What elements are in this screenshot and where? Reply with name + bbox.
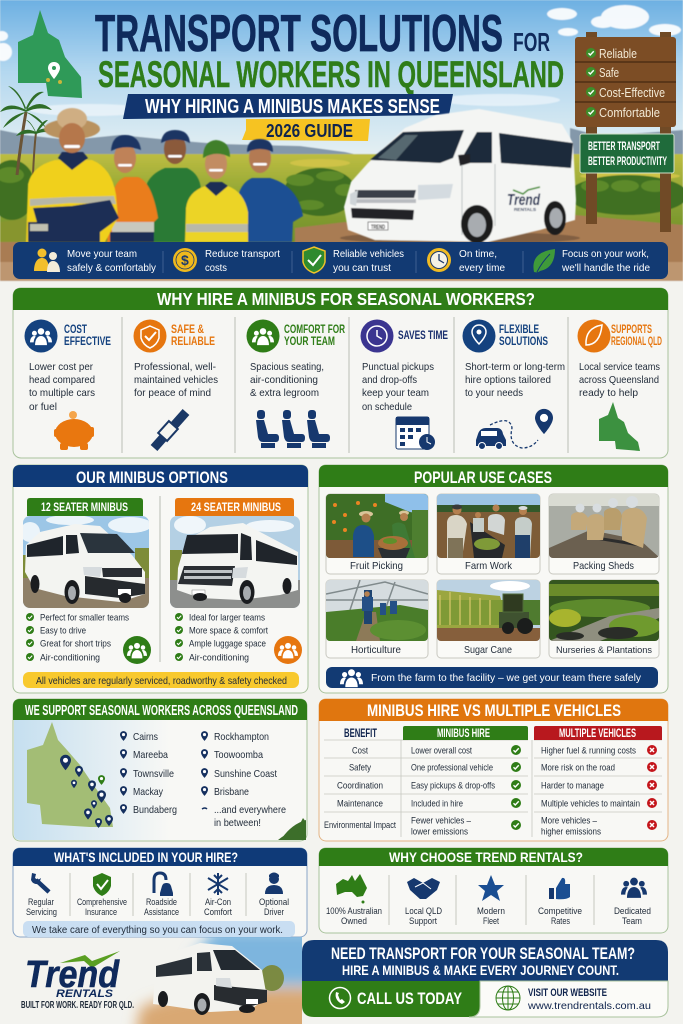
callout: farm to facility (326, 667, 658, 688)
column: regional QLD: Local service teams (579, 361, 660, 373)
panel: why choose trend rentals: WHY CHOOSE TREND RENTALS? (389, 849, 583, 865)
item: local support (405, 878, 442, 927)
text: focus on your work: Focus on your work, (562, 248, 649, 260)
table: multiple vehicles column: More vehicles – (541, 816, 598, 826)
guide badge: 2026 GUIDE (266, 121, 353, 141)
list: service towns: Rockhampton (214, 731, 269, 743)
icon: check list 12 seater: Great for short trips (40, 638, 111, 650)
list: service towns: Brisbane (214, 786, 249, 798)
text: reduce costs: costs (205, 262, 227, 274)
panel: our minibus options: OUR MINIBUS OPTIONS (76, 469, 228, 487)
panel: call to action: HIRE A MINIBUS & MAKE EVERY JOURNEY COUNT. (342, 962, 619, 978)
panel: call to action (302, 940, 668, 1017)
text: on time: On time, (459, 248, 497, 260)
table: multiple vehicles column (541, 745, 657, 838)
table header (344, 726, 662, 740)
item: modern fleet (477, 875, 505, 927)
icon: clock (427, 248, 451, 272)
icon: Queensland map with pin (18, 10, 82, 98)
item: regular servicing: Servicing (26, 907, 57, 918)
column: safe and reliable (134, 320, 218, 448)
icon: check list 24 seater: Ample luggage space (189, 638, 266, 650)
column: cost effective: to multiple cars (29, 387, 95, 399)
wooden sign (575, 32, 676, 232)
worker: orange vest (107, 135, 158, 242)
table header: MULTIPLE VEHICLES (559, 728, 636, 740)
worker: hat and crossed arms (26, 108, 119, 242)
item: competitive rates: Competitive (538, 906, 582, 917)
item: roadside assistance: Roadside (146, 897, 177, 908)
photo: 24 seater bus (170, 516, 300, 608)
logo: trend rentals: RENTALS (56, 988, 114, 1000)
column: safe and reliable: SAFE & (171, 322, 204, 336)
icon: check list 24 seater (175, 612, 268, 664)
title: FOR (513, 27, 550, 57)
item: regular servicing (26, 873, 57, 918)
button: call us today: CALL US TODAY (357, 989, 463, 1008)
item: local support: Local QLD (405, 906, 442, 917)
subtitle ribbon: WHY HIRING A MINIBUS MAKES SENSE (145, 96, 440, 118)
subtitle ribbon (123, 94, 453, 119)
text: reduce costs (205, 248, 280, 274)
column: safe and reliable: maintained vehicles (134, 374, 218, 386)
card: fruit picking: Fruit Picking (350, 560, 403, 572)
icon: car route to pin (476, 409, 553, 450)
panel: why hire a minibus (13, 288, 668, 458)
panel: popular use cases: POPULAR USE CASES (414, 469, 552, 487)
table: benefit labels: Environmental Impact (324, 820, 396, 830)
table header: MINIBUS HIRE (437, 728, 490, 740)
item: optional driver: Optional (259, 897, 289, 908)
card: sugar cane (437, 580, 540, 658)
panel: why choose trend rentals (319, 848, 668, 933)
icon: Queensland map (599, 402, 640, 451)
panel: minibus vs multiple vehicles (319, 699, 668, 841)
table: minibus hire column (411, 745, 521, 838)
column: cost effective: head compared (29, 374, 95, 386)
photo: minibus in outback (128, 937, 302, 1024)
table: multiple vehicles column: More risk on the road (541, 762, 615, 774)
icon: people (34, 248, 60, 272)
column: flexible (462, 320, 565, 450)
card: packing sheds (549, 494, 660, 574)
callout: we take care: We take care of everything so you can focus on your work. (32, 924, 283, 936)
column: safe and reliable: Professional, well- (134, 361, 216, 373)
item: dedicated team (614, 878, 651, 927)
text: reduce costs: Reduce transport (205, 248, 280, 260)
minibus hero: Trend (507, 192, 541, 209)
12 seater option: 12 SEATER MINIBUS (41, 500, 128, 514)
palm trees (0, 86, 56, 175)
panel: what's included: WHAT'S INCLUDED IN YOUR HIRE? (54, 849, 238, 865)
item: modern fleet: Modern (477, 906, 505, 917)
minibus hero (340, 109, 580, 244)
item: optional driver: Driver (264, 907, 284, 918)
icon: check list 12 seater: Perfect for smaller teams (40, 612, 129, 624)
callout: safety checked: All vehicles are regularly serviced, roadworthy & safety checked (36, 675, 287, 687)
item: comprehensive insurance: Comprehensive (77, 897, 127, 908)
column: comfort: air-conditioning (250, 374, 318, 386)
worker: blue shirt (235, 139, 303, 242)
item: competitive rates (538, 878, 582, 927)
worker: green shirt (144, 130, 201, 242)
item: air-con comfort (204, 873, 232, 918)
hero scene background (0, 0, 683, 285)
item: regular servicing: Regular (28, 897, 54, 908)
workers group (26, 108, 303, 242)
wooden sign: Comfortable (599, 105, 660, 120)
table: benefit labels: Coordination (337, 780, 383, 792)
text: focus on your work (561, 248, 650, 274)
column: saves time: SAVES TIME (398, 328, 448, 342)
list: service towns: Bundaberg (133, 804, 177, 816)
callout: farm to facility: From the farm to the facility – we get your team there safely (371, 672, 642, 684)
item: modern fleet: Fleet (483, 916, 499, 927)
card: horticulture (326, 580, 428, 658)
column: safe and reliable: RELIABLE (171, 334, 215, 348)
column: regional QLD: SUPPORTS (611, 322, 652, 336)
panel: minibus vs multiple vehicles: MINIBUS HIRE VS MULTIPLE VEHICLES (367, 701, 621, 720)
panel: what's included (13, 848, 307, 937)
panel: queensland coverage (13, 699, 307, 841)
24 seater option (170, 498, 302, 664)
item: competitive rates: Rates (551, 916, 570, 927)
productivity sign (580, 134, 674, 173)
table: benefit labels: Cost (352, 746, 368, 756)
panel: queensland coverage: WE SUPPORT SEASONAL WORKERS ACROSS QUEENSLAND (25, 703, 298, 719)
column: saves time (360, 320, 448, 450)
list: service towns: Cairns (133, 731, 158, 743)
table: multiple vehicles column: Higher fuel & running costs (541, 746, 636, 756)
button: call us today (302, 981, 480, 1017)
icon: calendar (396, 417, 435, 450)
column: comfort (246, 320, 345, 448)
icon: check list 12 seater: Easy to drive (40, 626, 86, 636)
table: minibus hire column: Lower overall cost (411, 746, 472, 756)
card: nurseries and plantations (549, 580, 661, 658)
website link: www.trendrentals.com.au (527, 1000, 651, 1012)
logo: trend rentals: Trend (25, 954, 120, 996)
column: cost effective: or fuel (29, 401, 57, 413)
text: move your team (67, 248, 157, 274)
icon: check list 24 seater: Ideal for larger teams (189, 612, 265, 624)
text: move your team: safely & comfortably (67, 262, 157, 274)
column: cost effective: Lower cost per (29, 361, 93, 373)
icon: check list 24 seater: Air-conditioning (189, 652, 249, 664)
icon: dollar coin (173, 248, 197, 272)
icon: piggy bank (54, 411, 94, 450)
table: multiple vehicles column: Multiple vehicles to maintain (541, 798, 640, 810)
column: regional QLD: ready to help (579, 387, 638, 399)
column: comfort: Spacious seating, (250, 361, 324, 373)
website link: VISIT OUR WEBSITE (528, 987, 607, 999)
text: reliable vehicles (333, 248, 404, 274)
item: optional driver (259, 872, 289, 918)
panel: our minibus options (13, 465, 308, 693)
column: comfort: & extra legroom (250, 387, 319, 399)
item: roadside assistance (144, 873, 179, 918)
list: service towns (120, 731, 286, 829)
table header: BENEFIT (344, 728, 377, 740)
column: comfort: YOUR TEAM (284, 334, 335, 348)
column: flexible: to your needs (465, 387, 523, 399)
worker: yellow shirt (185, 140, 248, 242)
text: on time: every time (459, 262, 505, 274)
table: benefit labels: Safety (349, 762, 371, 774)
minibus hero: RENTALS (514, 207, 536, 212)
benefits strip (13, 242, 668, 279)
item: local support: Support (409, 916, 437, 927)
callout: safety checked (23, 672, 299, 688)
list: service towns: ...and everywhere (214, 804, 286, 816)
column: flexible: Short-term or long-term (465, 361, 565, 373)
column: regional QLD (578, 320, 662, 451)
item: air-con comfort: Air-Con (205, 897, 231, 908)
table: multiple vehicles column: higher emissions (541, 826, 601, 838)
card: horticulture: Horticulture (351, 644, 401, 656)
column: saves time: on schedule (362, 401, 412, 413)
list: service towns: Mareeba (133, 749, 168, 761)
wooden sign: Safe (599, 65, 619, 80)
column: saves time: and drop-offs (362, 374, 417, 386)
table: minibus hire column: Included in hire (411, 798, 463, 810)
list: service towns: in between! (214, 817, 261, 829)
table: benefit labels: Maintenance (337, 798, 383, 810)
icon: check list 12 seater (26, 612, 129, 664)
text: on time (459, 248, 505, 274)
column: cost effective: COST (64, 322, 87, 336)
list: service towns: Toowoomba (214, 749, 263, 761)
card: farm work (437, 494, 540, 574)
text: reliable vehicles: Reliable vehicles (333, 248, 404, 260)
text: reliable vehicles: you can trust (333, 262, 391, 274)
minibus hero: TREND (371, 224, 385, 231)
logo: trend rentals: BUILT FOR WORK. READY FOR QLD. (21, 1000, 134, 1011)
icon: three seats (256, 410, 330, 448)
title (95, 5, 564, 95)
table: minibus hire column: One professional vehicle (411, 762, 493, 774)
icon: dollar coin: $ (181, 252, 189, 268)
item: roadside assistance: Assistance (144, 907, 179, 918)
column: flexible: hire options tailored (465, 374, 551, 386)
wooden sign: Reliable (599, 46, 637, 61)
website link (469, 981, 668, 1017)
column: cost effective: EFFECTIVE (64, 334, 111, 348)
table: benefit labels (324, 746, 396, 830)
12 seater option (20, 498, 152, 664)
icon: palm leaves (278, 818, 306, 840)
card: packing sheds: Packing Sheds (573, 560, 634, 572)
item: australian owned: Owned (341, 916, 367, 927)
column: flexible: FLEXIBLE (499, 322, 539, 336)
column: regional QLD: across Queensland (579, 374, 659, 386)
icon: leaf (533, 249, 555, 272)
column: saves time: keep your team (362, 387, 429, 399)
logo: trend rentals (21, 951, 134, 1011)
panel: popular use cases (319, 465, 668, 693)
list: service towns: Mackay (133, 786, 164, 798)
column: saves time: Punctual pickups (362, 361, 434, 373)
text: move your team: Move your team (67, 248, 137, 260)
column: flexible: SOLUTIONS (499, 334, 548, 348)
text: focus on your work: we'll handle the ride (561, 262, 650, 274)
item: comprehensive insurance: Insurance (85, 907, 117, 918)
item: australian owned: 100% Australian (326, 906, 382, 917)
map: queensland pins (27, 722, 113, 828)
icon: seat belt (154, 412, 186, 448)
icon: shield (303, 247, 325, 273)
item: dedicated team: Dedicated (614, 906, 651, 917)
card: farm work: Farm Work (465, 560, 513, 572)
item: comprehensive insurance (77, 873, 127, 918)
icon: team green (123, 636, 151, 664)
24 seater option: 24 SEATER MINIBUS (191, 500, 281, 514)
icon: check list 12 seater: Air-conditioning (40, 652, 100, 664)
column: comfort: COMFORT FOR (284, 322, 345, 336)
item: australian owned (326, 874, 382, 927)
icon: team orange (274, 636, 302, 664)
list: service towns: Sunshine Coast (214, 768, 277, 780)
card: fruit picking (326, 494, 428, 574)
table: minibus hire column: Fewer vehicles – (411, 816, 472, 826)
panel: why hire a minibus: WHY HIRE A MINIBUS FOR SEASONAL WORKERS? (157, 289, 535, 309)
list: service towns: Townsville (133, 768, 174, 780)
table: multiple vehicles column: Harder to manage (541, 780, 604, 792)
column: cost effective (24, 320, 111, 450)
wooden sign: Cost-Effective (599, 85, 665, 100)
item: air-con comfort: Comfort (204, 907, 232, 918)
table: minibus hire column: Easy pickups & drop-offs (411, 780, 495, 792)
icon: check list 24 seater: More space & comfort (189, 626, 268, 636)
table: minibus hire column: lower emissions (411, 826, 468, 838)
card: sugar cane: Sugar Cane (464, 644, 512, 656)
column: safe and reliable: for peace of mind (134, 387, 211, 399)
item: dedicated team: Team (622, 916, 642, 927)
card: nurseries and plantations: Nurseries & Plantations (556, 645, 653, 655)
photo: 12 seater minibus (20, 515, 152, 608)
